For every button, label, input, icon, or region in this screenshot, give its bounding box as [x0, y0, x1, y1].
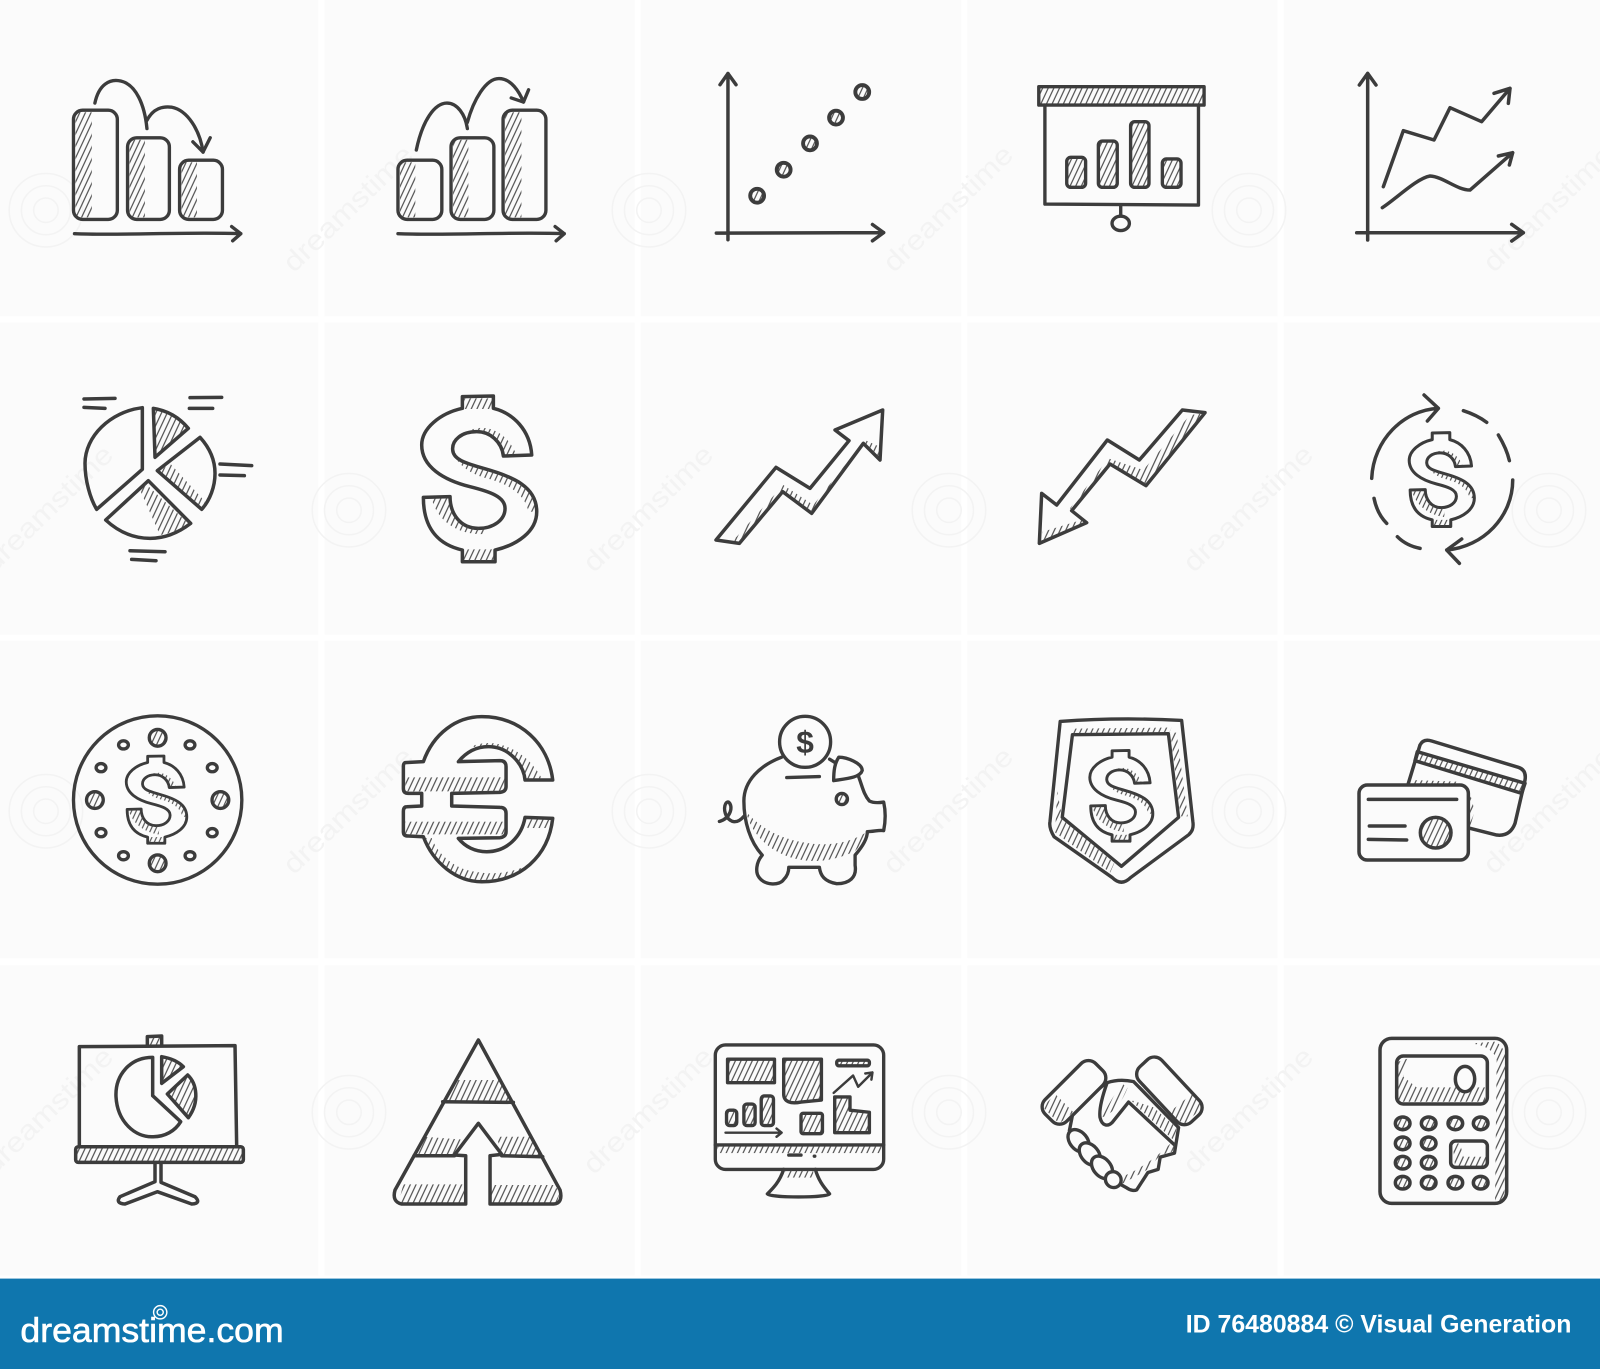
watermark text: dreamstime — [1177, 1041, 1319, 1180]
icon: euro sign — [403, 717, 553, 882]
icon: monitor dashboard — [715, 1045, 884, 1197]
icon: falling bar chart — [73, 80, 241, 241]
watermark text: dreamstime — [577, 1041, 719, 1180]
watermark text: dreamstime — [277, 741, 419, 880]
dollar sign — [126, 756, 187, 843]
icon: large dollar sign — [422, 396, 537, 562]
coin rim and dots — [73, 716, 242, 884]
tail — [719, 802, 744, 822]
fingers — [1064, 1125, 1124, 1191]
coin dollar text: $ — [796, 724, 814, 760]
watermark text: dreamstime — [1477, 741, 1600, 880]
logo wordmark: dreamstime.com — [20, 1312, 284, 1350]
footer logo — [20, 1306, 284, 1350]
icon: rising bar chart — [398, 79, 564, 241]
coin slot — [787, 777, 819, 778]
eye — [836, 793, 847, 805]
hand shading — [1102, 1084, 1177, 1184]
cuffs — [1038, 1056, 1110, 1128]
icon: rising zigzag arrow — [716, 410, 883, 543]
circular arrows — [1372, 395, 1513, 563]
icon: presentation board with bars — [1039, 87, 1204, 231]
watermark text: dreamstime — [877, 741, 1019, 880]
watermark text — [0, 139, 1600, 1180]
watermark text: dreamstime — [1477, 139, 1600, 278]
icon: falling zigzag arrow — [1039, 410, 1205, 543]
watermark text: dreamstime — [577, 439, 719, 578]
dollar sign — [1090, 750, 1153, 841]
icon: dollar with circular arrows — [1372, 395, 1513, 563]
icon: exploded pie chart — [84, 397, 252, 561]
dollar sign — [1409, 433, 1474, 526]
ear — [834, 757, 862, 781]
shield outline — [1050, 719, 1193, 882]
hands — [1069, 1080, 1179, 1190]
icon: pyramid with up arrow — [394, 1040, 561, 1204]
footer bar — [0, 1279, 1600, 1369]
watermark spirals — [9, 173, 1586, 1149]
footer credit: ID 76480884 © Visual Generation — [1186, 1311, 1571, 1339]
watermark text: dreamstime — [277, 139, 419, 278]
watermark text: dreamstime — [877, 139, 1019, 278]
icon: coin with dollar — [73, 716, 242, 884]
logo spiral — [154, 1306, 167, 1319]
icon: calculator — [1380, 1038, 1507, 1203]
icon: scatter plot — [716, 73, 884, 241]
icon: shield with dollar — [1050, 719, 1193, 882]
icon: piggy bank with coin — [719, 716, 885, 884]
icon: presentation board with pie chart — [76, 1036, 243, 1204]
pig body — [744, 757, 885, 884]
watermark text: dreamstime — [1177, 439, 1319, 578]
icon: handshake — [1038, 1053, 1206, 1191]
icon: credit cards — [1359, 740, 1525, 860]
icon: line chart with two rising arrows — [1357, 73, 1523, 241]
body shading — [746, 811, 867, 861]
coin — [780, 716, 831, 767]
